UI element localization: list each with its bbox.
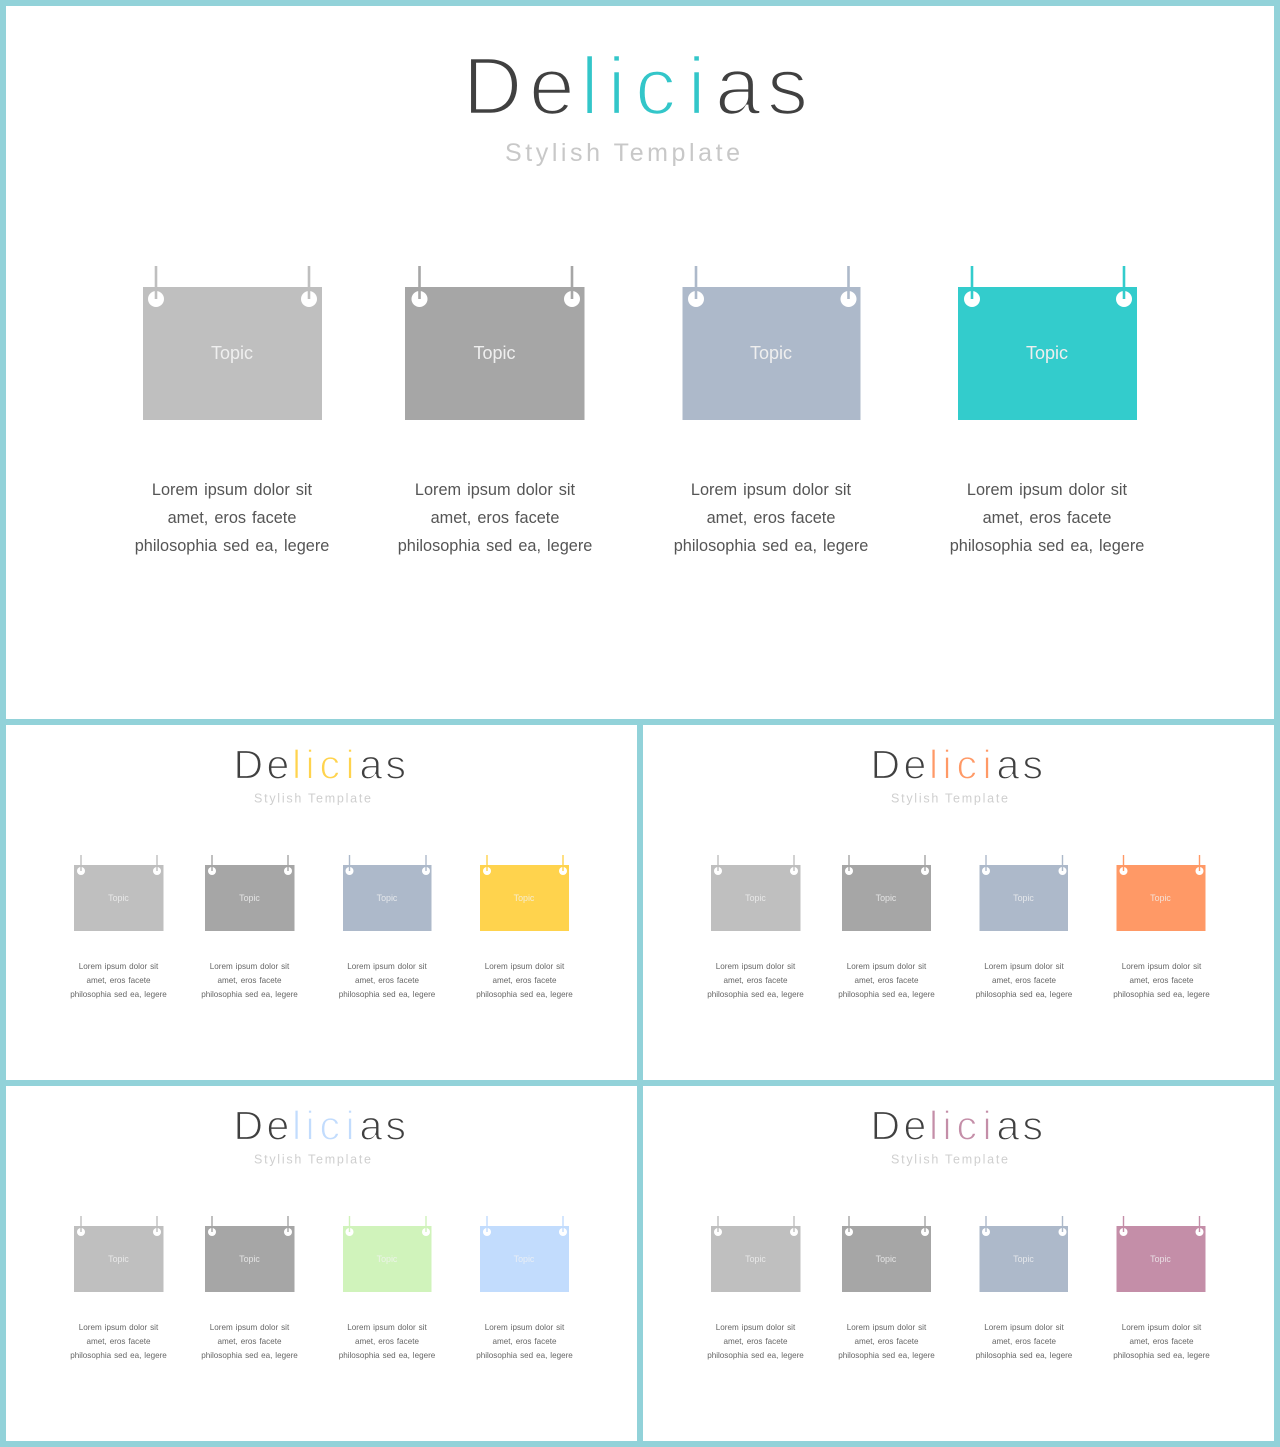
- panel: green and blue variant: [6, 1086, 637, 1441]
- title: i: [982, 742, 992, 788]
- title: l: [292, 742, 301, 788]
- hanging card 1: [711, 1216, 800, 1292]
- hanging card 3: [980, 1216, 1068, 1292]
- text block 4: Lorem ipsum dolor sit: [1122, 1323, 1202, 1332]
- text block 2: amet, eros facete: [855, 976, 919, 985]
- text block 1: Lorem ipsum dolor sit: [79, 1323, 159, 1332]
- hanging card 1: Topic: [108, 893, 129, 903]
- panel: yellow variant: [6, 725, 637, 1080]
- text block 3: philosophia sed ea, legere: [976, 990, 1073, 999]
- title: s: [386, 742, 406, 788]
- hanging card 3: Topic: [750, 343, 792, 363]
- text block 2: [398, 481, 592, 555]
- text block 1: Lorem ipsum dolor sit: [716, 1323, 796, 1332]
- text block 3: amet, eros facete: [707, 509, 835, 527]
- text block 2: Lorem ipsum dolor sit: [210, 1323, 290, 1332]
- hanging card 4: [480, 855, 569, 931]
- text block 3: Lorem ipsum dolor sit: [691, 481, 852, 499]
- title: i: [306, 1102, 315, 1148]
- text block 4: [950, 481, 1144, 555]
- text block 4: Lorem ipsum dolor sit: [485, 962, 565, 971]
- text block 3: [976, 1323, 1073, 1360]
- hanging card 1: Topic: [745, 1254, 766, 1264]
- text block 4: philosophia sed ea, legere: [476, 1351, 573, 1360]
- text block 1: philosophia sed ea, legere: [70, 990, 167, 999]
- subtitle: Stylish Template: [891, 1152, 1008, 1166]
- text block 3: philosophia sed ea, legere: [339, 990, 436, 999]
- title: s: [386, 1102, 406, 1148]
- text block 2: Lorem ipsum dolor sit: [847, 962, 927, 971]
- title: D: [234, 1102, 263, 1148]
- title: i: [346, 1102, 355, 1148]
- hanging card 2: Topic: [239, 1254, 260, 1264]
- text block 4: amet, eros facete: [493, 976, 557, 985]
- text block 4: Lorem ipsum dolor sit: [1122, 962, 1202, 971]
- subtitle: Stylish Template: [505, 139, 740, 167]
- title: e: [266, 742, 289, 788]
- hanging card 4: Topic: [514, 893, 535, 903]
- title: i: [688, 41, 706, 132]
- panel: orange variant: [643, 725, 1274, 1080]
- hanging card 4: [1116, 1216, 1206, 1292]
- title: a: [360, 1102, 382, 1148]
- hanging card 2: [405, 266, 584, 420]
- hanging card 4: [958, 266, 1137, 420]
- title: e: [904, 1102, 926, 1148]
- hanging card 1: [74, 855, 164, 931]
- title: s: [767, 41, 808, 132]
- text block 3: [339, 962, 436, 999]
- text block 3: philosophia sed ea, legere: [976, 1351, 1073, 1360]
- hanging card 3: [980, 855, 1068, 931]
- text block 1: Lorem ipsum dolor sit: [716, 962, 796, 971]
- title: e: [904, 742, 926, 788]
- text block 4: philosophia sed ea, legere: [476, 990, 573, 999]
- hanging card 3: [343, 855, 432, 931]
- hanging card 3: Topic: [377, 893, 398, 903]
- subtitle: Stylish Template: [254, 792, 371, 806]
- text block 3: [339, 1323, 436, 1360]
- text block 4: philosophia sed ea, legere: [1113, 990, 1210, 999]
- text block 1: philosophia sed ea, legere: [135, 537, 329, 555]
- text block 3: amet, eros facete: [355, 1337, 419, 1346]
- title: a: [360, 742, 382, 788]
- text block 2: Lorem ipsum dolor sit: [847, 1323, 927, 1332]
- text block 2: amet, eros facete: [218, 1337, 282, 1346]
- title: c: [320, 742, 340, 788]
- hanging card 4: Topic: [1150, 1254, 1171, 1264]
- hanging card 4: [480, 1216, 569, 1292]
- text block 1: Lorem ipsum dolor sit: [152, 481, 313, 499]
- text block 3: [674, 481, 868, 555]
- hanging card 2: Topic: [876, 893, 897, 903]
- text block 3: amet, eros facete: [355, 976, 419, 985]
- text block 3: amet, eros facete: [992, 976, 1056, 985]
- title: a: [996, 1102, 1020, 1148]
- text block 4: amet, eros facete: [493, 1337, 557, 1346]
- subtitle: Stylish Template: [254, 1152, 371, 1166]
- title: i: [942, 742, 952, 788]
- text block 3: amet, eros facete: [992, 1337, 1056, 1346]
- text block 4: philosophia sed ea, legere: [950, 537, 1144, 555]
- title: c: [956, 742, 977, 788]
- hanging card 3: Topic: [1013, 1254, 1034, 1264]
- text block 1: amet, eros facete: [724, 976, 788, 985]
- hanging card 3: [343, 1216, 432, 1292]
- title: i: [942, 1102, 952, 1148]
- text block 1: [707, 962, 804, 999]
- text block 3: Lorem ipsum dolor sit: [984, 962, 1064, 971]
- title: c: [956, 1102, 977, 1148]
- text block 2: Lorem ipsum dolor sit: [210, 962, 290, 971]
- text block 3: Lorem ipsum dolor sit: [347, 962, 427, 971]
- text block 3: philosophia sed ea, legere: [339, 1351, 436, 1360]
- text block 2: philosophia sed ea, legere: [201, 1351, 298, 1360]
- text block 1: amet, eros facete: [87, 1337, 151, 1346]
- text block 1: amet, eros facete: [724, 1337, 788, 1346]
- hanging card 2: [205, 1216, 294, 1292]
- title: D: [870, 1102, 900, 1148]
- text block 4: Lorem ipsum dolor sit: [485, 1323, 565, 1332]
- panel: main slide teal: [6, 6, 1274, 719]
- title: s: [1022, 1102, 1043, 1148]
- text block 2: philosophia sed ea, legere: [398, 537, 592, 555]
- title: i: [608, 41, 626, 132]
- hanging card 2: Topic: [239, 893, 260, 903]
- text block 1: amet, eros facete: [168, 509, 296, 527]
- hanging card 1: Topic: [108, 1254, 129, 1264]
- hanging card 1: Topic: [745, 893, 766, 903]
- text block 1: [707, 1323, 804, 1360]
- text block 4: Lorem ipsum dolor sit: [967, 481, 1128, 499]
- hanging card 3: Topic: [1013, 893, 1034, 903]
- hanging card 3: [682, 266, 860, 420]
- text block 1: [70, 962, 167, 999]
- title: l: [292, 1102, 301, 1148]
- title: l: [580, 41, 599, 132]
- text block 2: [201, 1323, 298, 1360]
- title: e: [529, 41, 575, 132]
- text block 1: philosophia sed ea, legere: [707, 990, 804, 999]
- text block 2: amet, eros facete: [218, 976, 282, 985]
- text block 1: [135, 481, 329, 555]
- text block 3: Lorem ipsum dolor sit: [984, 1323, 1064, 1332]
- text block 4: amet, eros facete: [983, 509, 1111, 527]
- text block 4: [1113, 1323, 1210, 1360]
- hanging card 3: Topic: [377, 1254, 398, 1264]
- text block 4: amet, eros facete: [1130, 1337, 1194, 1346]
- text block 2: philosophia sed ea, legere: [201, 990, 298, 999]
- hanging card 2: Topic: [876, 1254, 897, 1264]
- hanging card 2: [842, 1216, 931, 1292]
- hanging card 1: Topic: [211, 343, 253, 363]
- hanging card 1: [74, 1216, 164, 1292]
- text block 4: [1113, 962, 1210, 999]
- hanging card 1: [711, 855, 800, 931]
- hanging card 2: Topic: [473, 343, 516, 363]
- title: D: [463, 41, 522, 132]
- title: l: [929, 1102, 938, 1148]
- hanging card 4: Topic: [514, 1254, 535, 1264]
- hanging card 4: Topic: [1150, 893, 1171, 903]
- text block 4: [476, 1323, 573, 1360]
- text block 1: [70, 1323, 167, 1360]
- title: D: [870, 742, 900, 788]
- panel: mauve variant: [643, 1086, 1274, 1441]
- title: l: [929, 742, 938, 788]
- text block 3: [976, 962, 1073, 999]
- title: a: [715, 41, 761, 132]
- text block 2: [201, 962, 298, 999]
- title: D: [234, 742, 263, 788]
- text block 2: amet, eros facete: [855, 1337, 919, 1346]
- hanging card 2: [205, 855, 294, 931]
- hanging card 1: [143, 266, 322, 420]
- hanging card 4: Topic: [1026, 343, 1068, 363]
- text block 4: amet, eros facete: [1130, 976, 1194, 985]
- title: i: [982, 1102, 992, 1148]
- subtitle: Stylish Template: [891, 792, 1008, 806]
- text block 1: philosophia sed ea, legere: [707, 1351, 804, 1360]
- text block 2: amet, eros facete: [431, 509, 559, 527]
- text block 4: [476, 962, 573, 999]
- title: c: [320, 1102, 340, 1148]
- title: i: [306, 742, 315, 788]
- hanging card 4: [1116, 855, 1206, 931]
- title: a: [996, 742, 1020, 788]
- hanging card 2: [842, 855, 931, 931]
- title: e: [266, 1102, 289, 1148]
- text block 3: Lorem ipsum dolor sit: [347, 1323, 427, 1332]
- text block 1: philosophia sed ea, legere: [70, 1351, 167, 1360]
- text block 2: [838, 962, 935, 999]
- title: s: [1022, 742, 1043, 788]
- text block 4: philosophia sed ea, legere: [1113, 1351, 1210, 1360]
- text block 2: [838, 1323, 935, 1360]
- text block 2: philosophia sed ea, legere: [838, 1351, 935, 1360]
- text block 1: amet, eros facete: [87, 976, 151, 985]
- text block 1: Lorem ipsum dolor sit: [79, 962, 159, 971]
- text block 2: philosophia sed ea, legere: [838, 990, 935, 999]
- title: c: [635, 41, 676, 132]
- text block 2: Lorem ipsum dolor sit: [415, 481, 576, 499]
- text block 3: philosophia sed ea, legere: [674, 537, 868, 555]
- title: i: [346, 742, 355, 788]
